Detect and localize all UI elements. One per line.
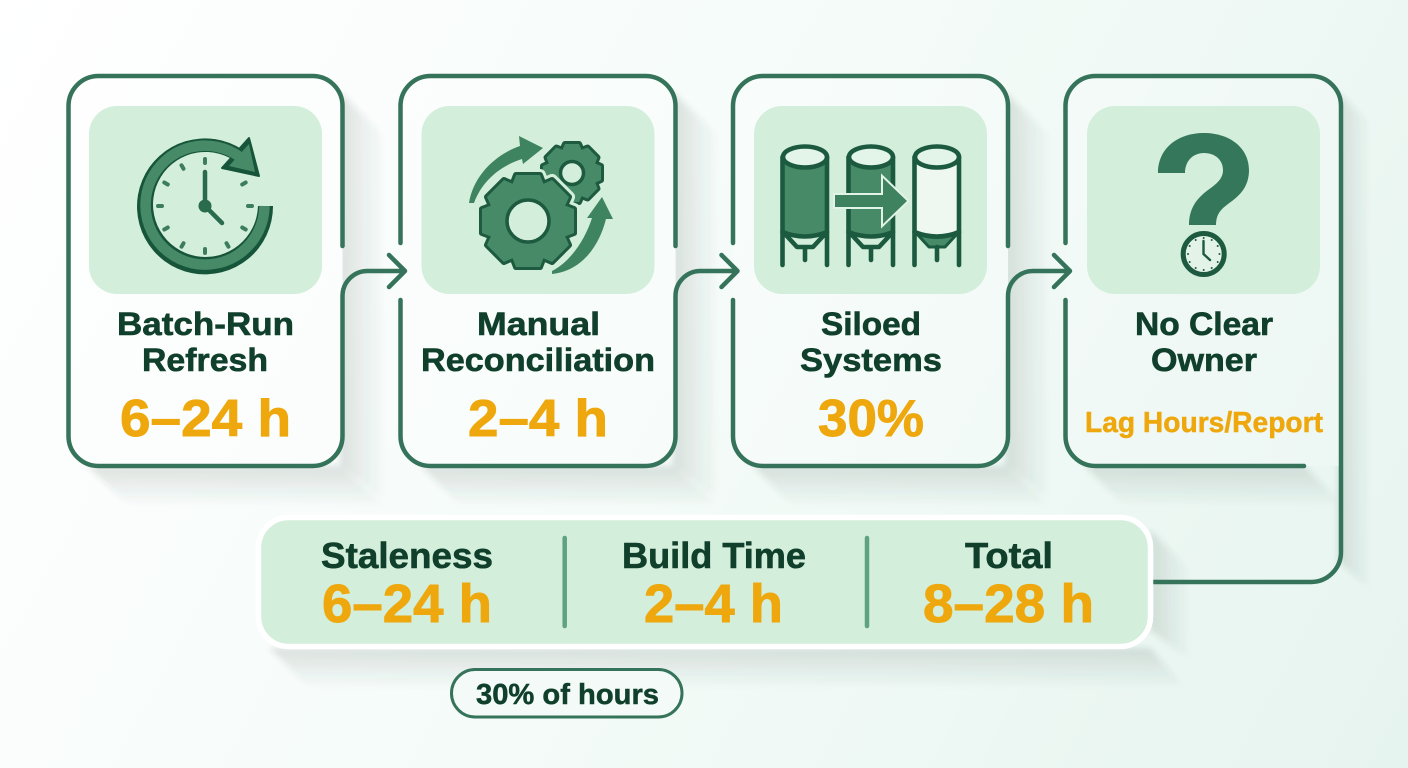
icon: silos with arrow <box>782 146 959 265</box>
title: Refresh <box>142 342 268 378</box>
stat: Build Time: Build Time <box>622 535 806 576</box>
icon panel: question <box>1087 106 1320 294</box>
diagonal shadows <box>88 92 1370 688</box>
stat: Staleness: Staleness <box>321 535 493 576</box>
title: Owner <box>1151 342 1257 378</box>
metric: 6–24 h <box>120 390 291 448</box>
title <box>1135 306 1273 378</box>
title <box>421 306 655 378</box>
icon: question mark with clock <box>1158 133 1249 274</box>
metric: 30% <box>818 390 924 448</box>
icon: clock with refresh arrow <box>137 138 273 274</box>
title: Siloed <box>821 306 921 342</box>
pill: 30% of hours: 30% of hours <box>476 679 659 711</box>
card: Batch-Run Refresh <box>68 76 342 466</box>
title: Manual <box>477 306 600 342</box>
card outlines and connector arrows <box>68 76 1341 582</box>
title: Batch-Run <box>117 306 294 342</box>
icon panel: clock <box>89 106 322 294</box>
title: Reconciliation <box>421 342 655 378</box>
stat: Staleness: 6–24 h <box>322 574 492 634</box>
stat: Total: Total <box>965 535 1053 576</box>
stat: Staleness <box>321 535 493 634</box>
icon panel: gears <box>422 106 654 294</box>
stat: Total <box>923 535 1094 634</box>
stat: Build Time: 2–4 h <box>644 574 783 634</box>
title: No Clear <box>1135 306 1273 342</box>
card: Siloed Systems <box>733 76 1008 466</box>
metric: 2–4 h <box>468 390 608 448</box>
summary panel <box>258 518 1150 646</box>
stat: Total: 8–28 h <box>923 574 1094 634</box>
stat: Build Time <box>622 535 806 634</box>
divider <box>865 538 869 626</box>
pill: 30% of hours <box>452 670 682 717</box>
title <box>800 306 942 378</box>
icon: gears with arrows <box>469 136 613 274</box>
divider <box>562 538 567 626</box>
icon panel: silos <box>754 106 987 294</box>
metric label: Lag Hours/Report <box>1085 407 1323 439</box>
title: Systems <box>800 342 942 378</box>
card: No Clear Owner <box>1066 76 1341 466</box>
title <box>117 306 294 378</box>
card: Manual Reconciliation <box>400 76 676 466</box>
